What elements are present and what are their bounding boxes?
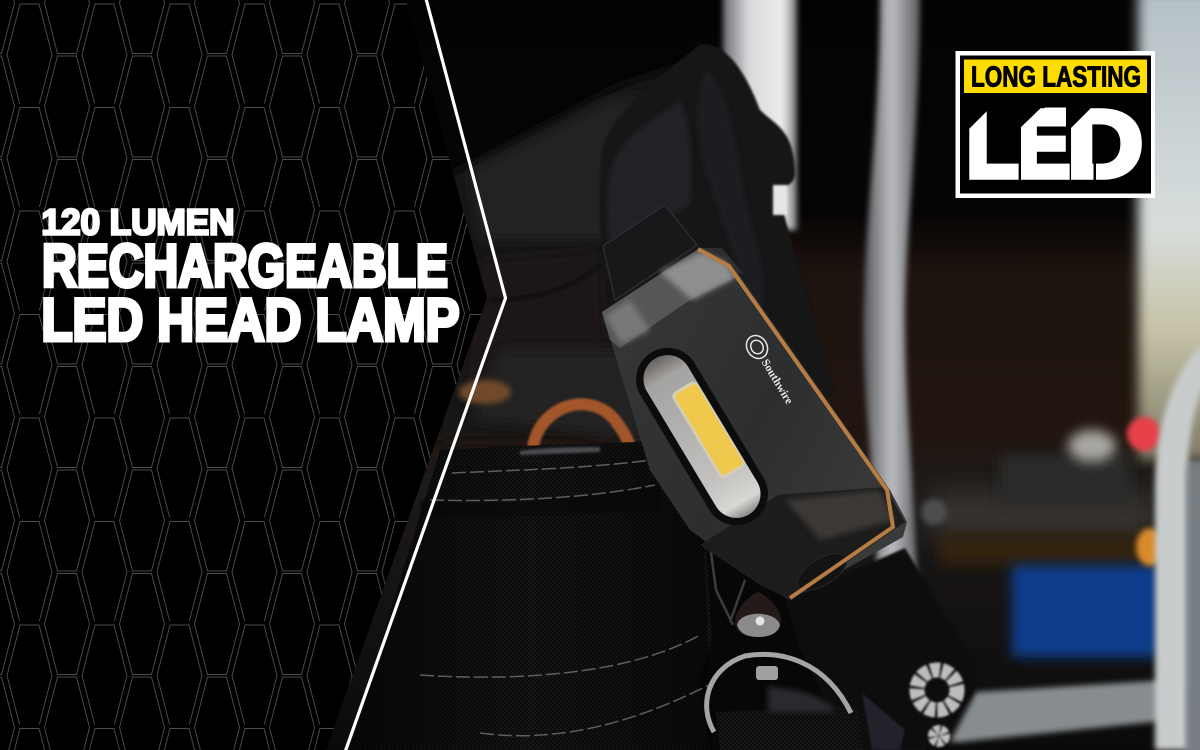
yellow LED panel bbox=[674, 383, 744, 476]
grey equipment blur bbox=[930, 490, 1155, 540]
stitching lines bbox=[420, 458, 715, 736]
lens bbox=[635, 346, 769, 527]
title bbox=[42, 201, 460, 354]
blurred white pole, centre bbox=[723, 0, 797, 230]
LED wordmark bbox=[966, 91, 1143, 198]
yellow banner bbox=[964, 60, 1147, 93]
blurred grey pole, right of strap bbox=[863, 0, 920, 600]
red light bbox=[1127, 417, 1161, 451]
blurred pale pole, far right bbox=[1138, 0, 1200, 460]
back edge of housing bbox=[697, 248, 745, 275]
grey shelf bar bbox=[950, 680, 1172, 742]
emblem on strap bbox=[917, 670, 957, 742]
photo: woven tool pouch bbox=[350, 440, 715, 750]
bottom dark facet bbox=[700, 487, 905, 600]
hexagon pattern bbox=[0, 0, 490, 750]
orange light bbox=[1136, 528, 1164, 566]
lens surround bbox=[625, 336, 779, 537]
white chevron line bbox=[344, 0, 506, 750]
switch bbox=[791, 546, 853, 598]
LED wordmark: L bbox=[966, 91, 1019, 198]
blurred orange ring bbox=[533, 404, 630, 447]
Southwire logo bbox=[742, 332, 799, 408]
title line 1: 120 LUMEN bbox=[42, 201, 234, 242]
photo: dark bag behind the lamp bbox=[440, 60, 740, 447]
title line 3: LED HEAD LAMP bbox=[42, 287, 460, 354]
photo: head strap over the bag bbox=[600, 44, 835, 395]
Southwire logo: Southwire bbox=[759, 357, 795, 407]
top silver facet bbox=[602, 250, 735, 348]
blurred orange tool handle bbox=[459, 380, 511, 404]
photo: carabiner, ball and D-ring hardware bbox=[695, 440, 862, 750]
photo: lower strap with Southwire emblem bbox=[785, 548, 975, 750]
white blob bbox=[1068, 430, 1116, 462]
LED wordmark: E bbox=[1018, 91, 1071, 198]
badge: long lasting LED bbox=[956, 51, 1155, 198]
lamp body bbox=[602, 250, 907, 600]
small grey circle bbox=[921, 499, 947, 525]
head lamp bbox=[602, 248, 907, 600]
curved pale pipe, far right bbox=[1155, 338, 1200, 750]
photo: black area behind hardware bbox=[680, 440, 880, 750]
title line 2: RECHARGEABLE bbox=[42, 232, 448, 299]
dark left panel with chevron edge bbox=[0, 0, 490, 750]
dark column behind pipe bbox=[1185, 460, 1200, 750]
LED wordmark: D bbox=[1067, 92, 1143, 198]
LED holder bbox=[670, 379, 747, 480]
banner text: LONG LASTING bbox=[971, 61, 1141, 93]
brown band bbox=[940, 535, 1160, 565]
orange accent stripe bbox=[698, 249, 893, 598]
blue crate blur bbox=[1012, 565, 1160, 657]
